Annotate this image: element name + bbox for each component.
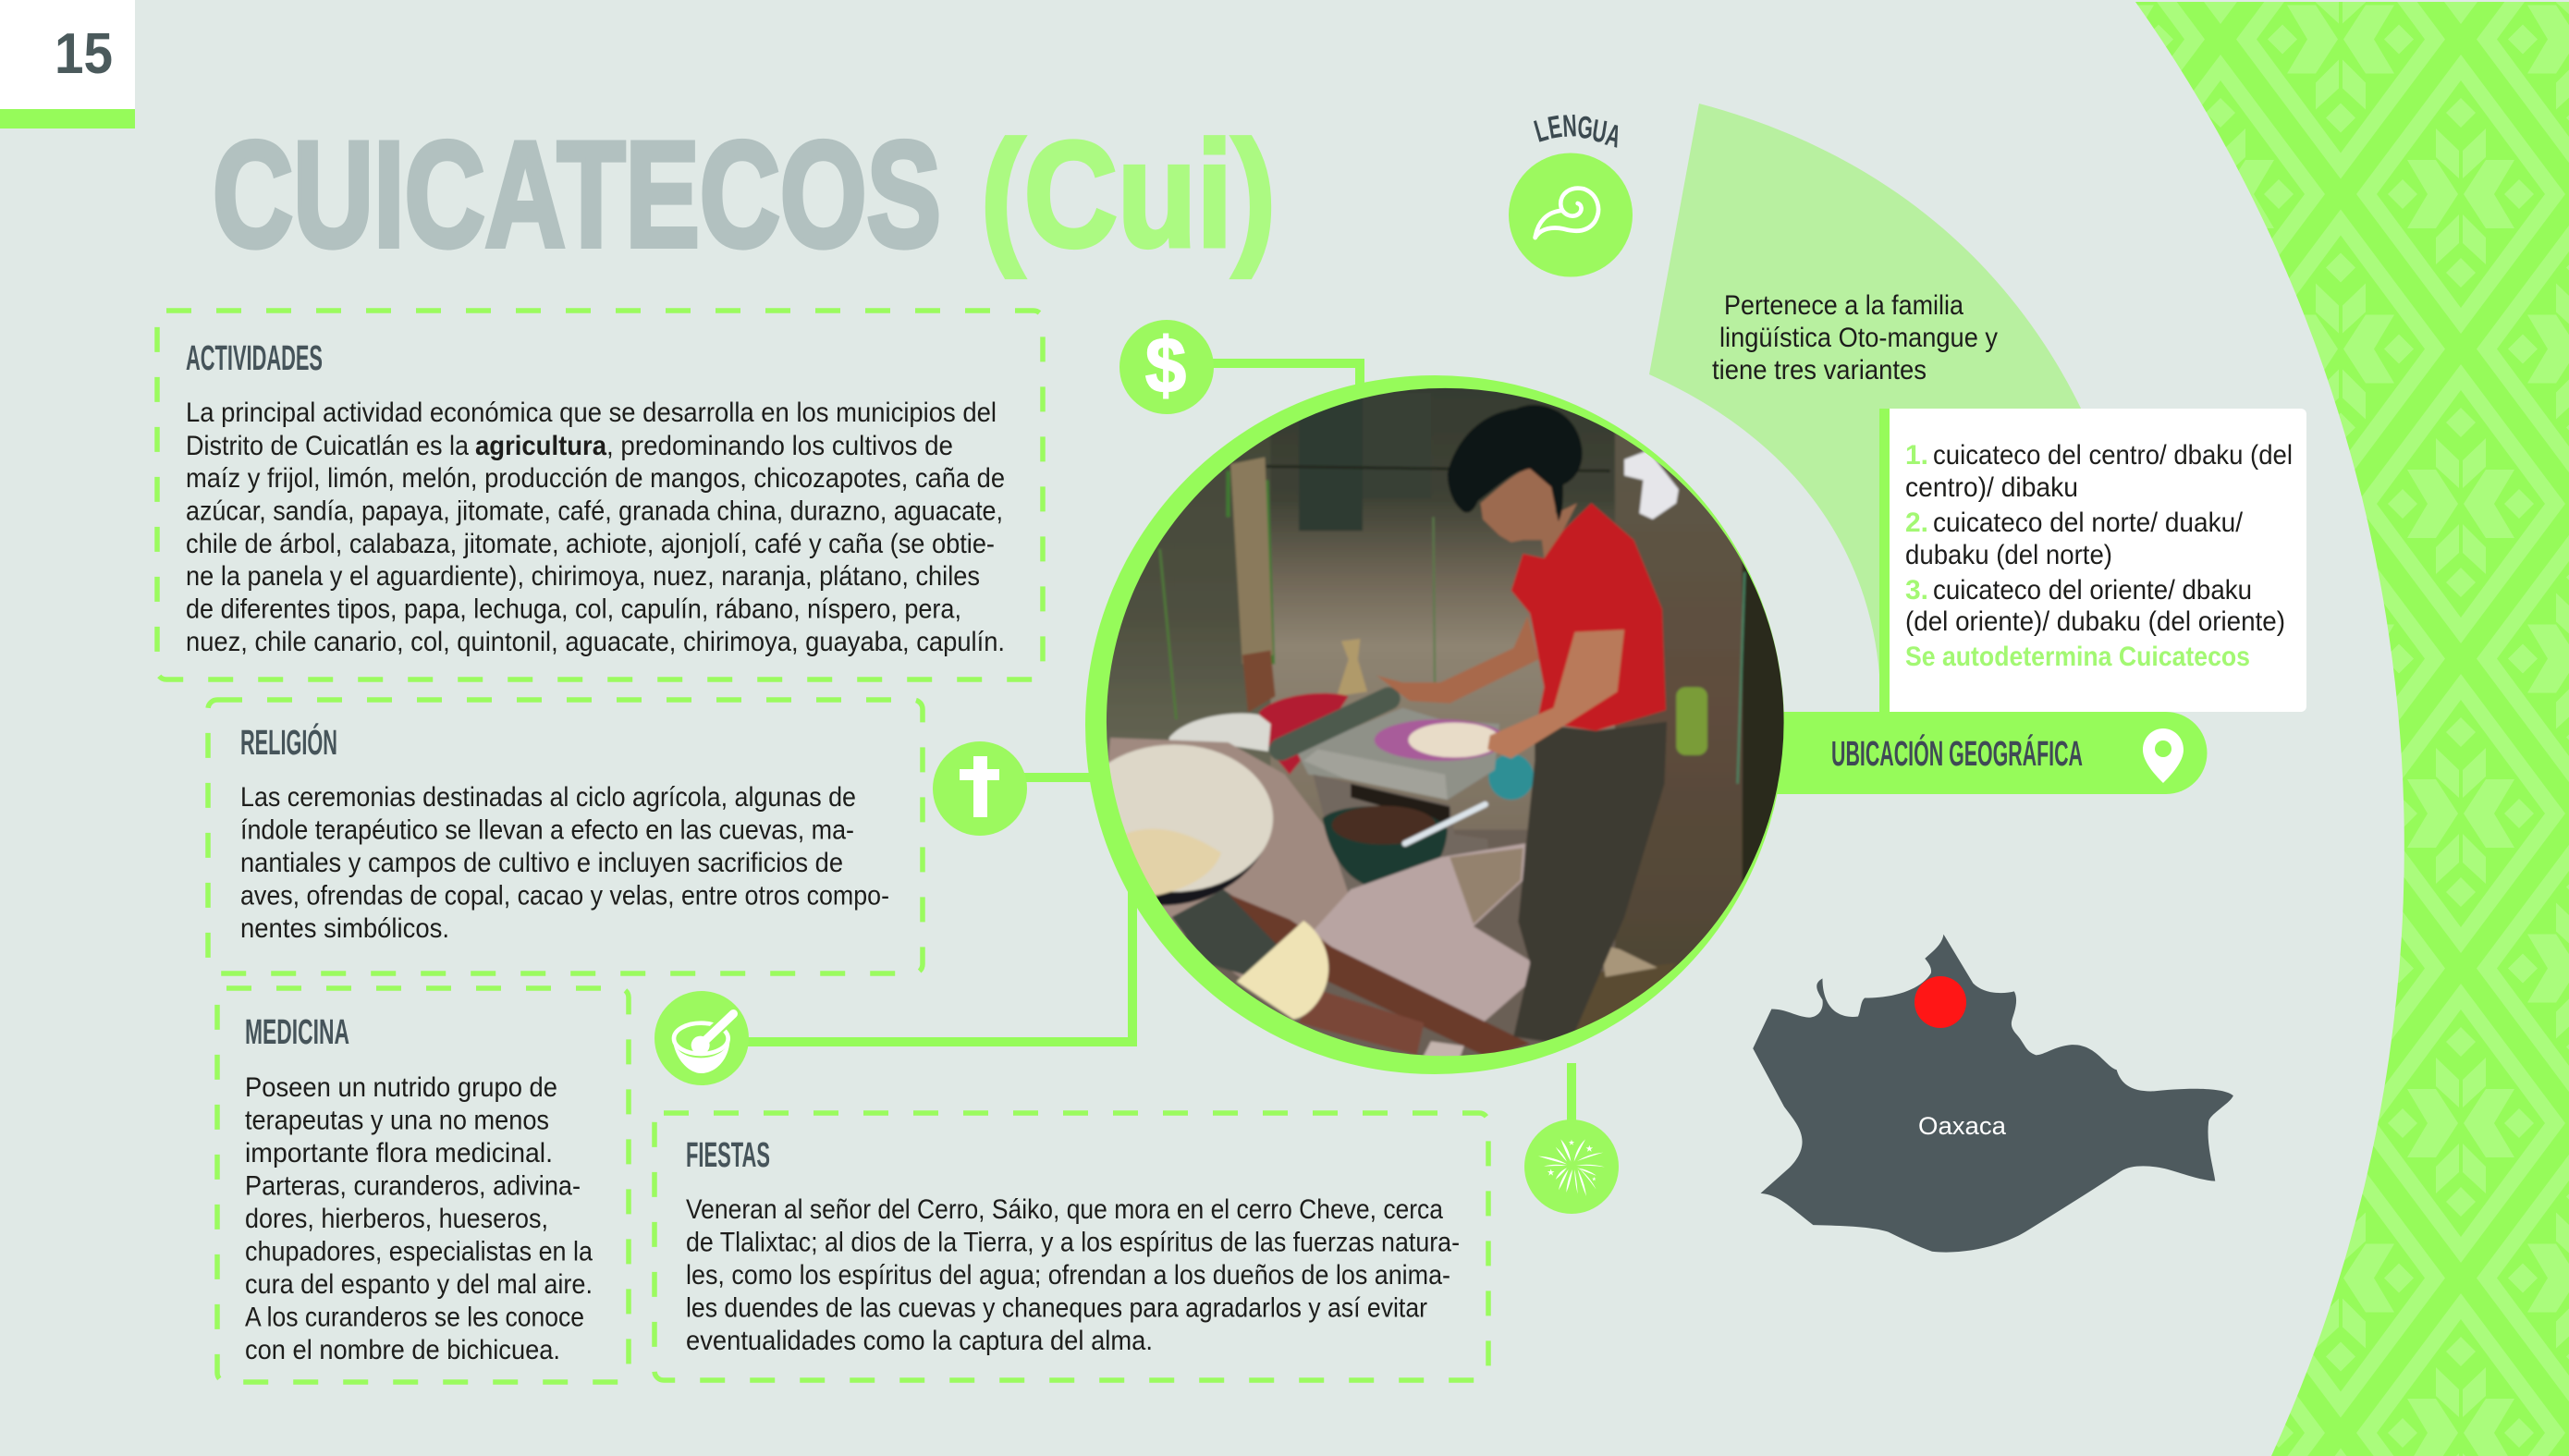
photo blue jar <box>1488 753 1534 800</box>
lengua heading: G <box>1577 109 1594 145</box>
text: medicina body: cura del espanto y del mal aire. <box>245 1269 593 1300</box>
text: actividades body: chile de árbol, calabaza, jitomate, achiote, ajonjolí, café y caña (se obtie- <box>186 529 995 559</box>
photo pants <box>1513 722 1667 1044</box>
text: religion body: Las ceremonias destinadas al ciclo agrícola, algunas de <box>240 782 856 813</box>
photo arms <box>1487 630 1624 758</box>
text: actividades body: La principal actividad económica que se desarrolla en los municipios del <box>186 398 997 428</box>
woven green pattern band <box>2135 2 2569 1456</box>
icon: fireworks <box>1524 1120 1619 1214</box>
text: fiestas body: les duendes de las cuevas y chaneques para agradarlos y así evitar <box>686 1292 1427 1324</box>
text: medicina body: dores, hierberos, hueseros, <box>245 1204 548 1234</box>
variants list: 2. <box>1905 508 1928 538</box>
connector: fiestas to photo <box>1567 1063 1576 1128</box>
lengua heading <box>1530 107 1625 154</box>
language wedge <box>1649 104 2085 721</box>
variants list: centro)/ dibaku <box>1905 472 2078 503</box>
text: actividades body: maíz y frijol, limón, melón, producción de mangos, chicozapotes, caña de <box>186 463 1005 494</box>
title: (Cui) <box>981 111 1276 278</box>
photo logs <box>1229 894 1530 1058</box>
text: medicina body: terapeutas y una no menos <box>245 1106 549 1135</box>
wedge text <box>1712 290 1998 385</box>
variants list: cuicateco del norte/ duaku/ <box>1933 508 2244 538</box>
heading: religion: RELIGIÓN <box>240 722 337 763</box>
page number tab <box>0 0 135 128</box>
icon: language swirl <box>1509 153 1633 277</box>
heading: fiestas: FIESTAS <box>686 1136 770 1175</box>
photo griddle <box>1156 854 1261 907</box>
text: actividades body: ne la panela y el aguardiente), chirimoya, nuez, naranja, plátano, chiles <box>186 561 980 592</box>
heading: actividades: ACTIVIDADES <box>186 339 323 378</box>
text: religion body: índole terapéutico se llevan a efecto en las cuevas, ma- <box>240 815 854 845</box>
panel: fiestas <box>654 1113 1488 1380</box>
lengua heading: N <box>1561 107 1578 143</box>
variants list: (del oriente)/ dubaku (del oriente) <box>1905 606 2285 637</box>
photo bottle <box>1337 639 1367 696</box>
photo: woman making tortillas <box>1106 388 1784 1056</box>
photo roller <box>1281 699 1388 749</box>
photo neck <box>1539 503 1577 558</box>
panel: religion <box>208 700 923 973</box>
lengua heading: A <box>1602 116 1625 154</box>
text: actividades body: de diferentes tipos, papa, lechuga, col, capulín, rábano, níspero, pera, <box>186 593 961 625</box>
text: actividades body <box>186 398 1005 657</box>
connector: medicina to photo <box>740 887 1132 1042</box>
map marker <box>1915 976 1966 1028</box>
lengua heading: L <box>1530 111 1551 149</box>
text: religion body: aves, ofrendas de copal, cacao y velas, entre otros compo- <box>240 880 889 912</box>
photo cloth <box>1624 450 1679 520</box>
lengua heading: E <box>1546 108 1564 145</box>
icon: dollar sign: $ <box>1145 322 1186 409</box>
variants list: Se autodetermina Cuicatecos <box>1905 642 2250 672</box>
text: religion body: nentes simbólicos. <box>240 913 449 944</box>
text: actividades body: , predominando los cultivos de <box>606 431 953 461</box>
photo stone base <box>1313 843 1530 1022</box>
icon: dollar sign <box>1119 320 1214 414</box>
text: actividades body: Distrito de Cuicatlán es la <box>186 431 469 461</box>
text: fiestas body: eventualidades como la captura del alma. <box>686 1326 1153 1356</box>
lengua heading: U <box>1590 112 1609 150</box>
variants list: cuicateco del oriente/ dbaku <box>1933 575 2252 606</box>
icon: cross <box>933 741 1027 836</box>
text: fiestas body: les, como los espíritus del agua; ofrendan a los dueños de los anima- <box>686 1260 1450 1291</box>
photo bucket <box>1259 693 1349 775</box>
photo ring <box>1085 375 1784 1074</box>
photo base <box>1182 828 1617 1056</box>
photo window <box>1676 687 1707 755</box>
text: medicina body: Parteras, curanderos, adivina- <box>245 1170 581 1202</box>
photo purple plate <box>1375 719 1507 761</box>
text: religion body: nantiales y campos de cultivo e incluyen sacrificios de <box>240 848 843 878</box>
text: actividades body: azúcar, sandía, papaya, jitomate, café, granada china, durazno, aguacate, <box>186 496 1003 527</box>
variants list: cuicateco del centro/ dbaku (del <box>1933 440 2293 471</box>
photo hair <box>1448 405 1583 521</box>
ubicacion geografica bar: UBICACIÓN GEOGRÁFICA <box>1831 733 2083 774</box>
text: religion body <box>240 782 889 944</box>
variants list <box>1905 440 2293 672</box>
text: medicina body <box>245 1072 593 1365</box>
photo bag <box>1169 714 1270 752</box>
photo floor <box>1574 964 1673 1030</box>
icon: mortar and pestle <box>654 991 749 1085</box>
title: CUICATECOS <box>213 111 941 278</box>
wedge text: lingüística Oto-mangue y <box>1719 323 1998 353</box>
panel: medicina <box>217 988 629 1382</box>
photo wall <box>1269 388 1616 830</box>
wedge text: tiene tres variantes <box>1712 355 1927 385</box>
heading: medicina: MEDICINA <box>245 1013 349 1052</box>
photo shirt <box>1511 503 1666 731</box>
wedge text: Pertenece a la familia <box>1724 290 1963 321</box>
connector: actividades to photo <box>1202 363 1360 398</box>
text: medicina body: A los curanderos se les conoce <box>245 1302 584 1333</box>
text: fiestas body <box>686 1194 1460 1356</box>
variants list: dubaku (del norte) <box>1905 540 2112 570</box>
text: actividades body: nuez, chile canario, col, quintonil, aguacate, chirimoya, guayaba, capulín. <box>186 627 1005 657</box>
text: medicina body: importante flora medicinal. <box>245 1138 553 1168</box>
icon: map pin <box>2143 728 2184 783</box>
text: medicina body: Poseen un nutrido grupo de <box>245 1072 557 1103</box>
text: medicina body: con el nombre de bichicuea. <box>245 1335 560 1365</box>
photo stove <box>1101 738 1353 986</box>
connector: religion to photo <box>1017 773 1100 782</box>
photo post <box>1230 458 1273 664</box>
photo folded tortilla <box>1237 921 1328 1019</box>
variants list: 3. <box>1905 575 1928 606</box>
photo lower stones <box>1171 889 1290 977</box>
text: actividades body: agricultura <box>475 431 606 461</box>
ubicacion geografica bar <box>1756 712 2208 794</box>
text: fiestas body: de Tlalixtac; al dios de la Tierra, y a los espíritus de las fuerzas natura- <box>686 1228 1460 1257</box>
photo pot <box>1323 806 1448 889</box>
page number tab: 15 <box>55 22 113 86</box>
map label: Oaxaca <box>1918 1112 2007 1140</box>
photo face <box>1481 469 1556 543</box>
map: oaxaca <box>1753 935 2233 1253</box>
panel: actividades <box>157 311 1043 679</box>
variants list: 1. <box>1905 440 1928 471</box>
text: medicina body: chupadores, especialistas en la <box>245 1237 593 1266</box>
text: fiestas body: Veneran al señor del Cerro, Sáiko, que mora en el cerro Cheve, cerca <box>686 1194 1443 1225</box>
photo metate <box>1297 708 1499 800</box>
variants white box <box>1879 409 2306 712</box>
